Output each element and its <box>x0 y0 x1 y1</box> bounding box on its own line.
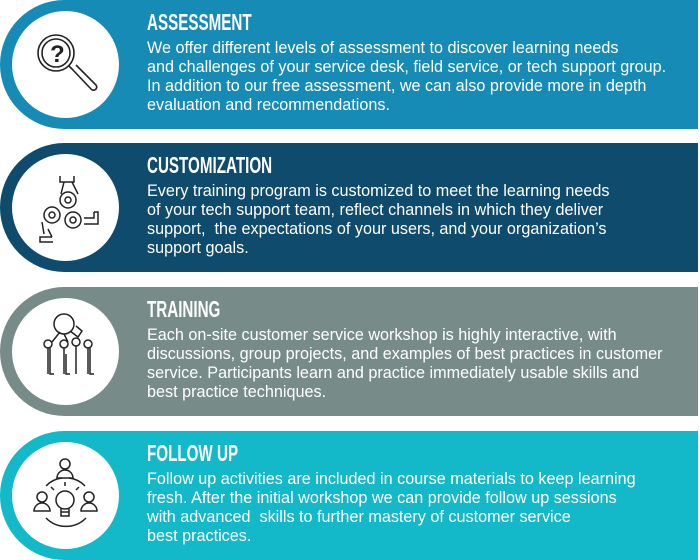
text: training: service. Participants learn and practice immediately usable skills and <box>147 364 639 382</box>
text: assessment <box>147 9 666 114</box>
text: follow up <box>147 440 636 545</box>
icon: people holding lightbulb <box>12 298 119 405</box>
panel: training <box>0 287 698 416</box>
panel: assessment <box>0 0 698 129</box>
text: assessment: In addition to our free assessment, we can also provide more in depth <box>147 77 646 95</box>
text: follow up: Follow up activities are included in course materials to keep learning <box>147 470 636 488</box>
text: assessment: and challenges of your service desk, field service, or tech support group. <box>147 58 666 76</box>
text: assessment: ASSESSMENT <box>147 9 252 35</box>
text: follow up: FOLLOW UP <box>147 440 238 466</box>
icon: magnifier with question mark <box>12 11 119 118</box>
text: training: discussions, group projects, and examples of best practices in customer <box>147 345 663 363</box>
text: training: TRAINING <box>147 296 220 322</box>
text: follow up: best practices. <box>147 527 251 545</box>
icon: magnifier with question mark: ? <box>50 41 65 68</box>
icon: gears and hands <box>12 154 119 261</box>
text: training: best practice techniques. <box>147 383 326 401</box>
icon: lightbulb with people <box>12 442 119 549</box>
text: follow up: with advanced skills to further mastery of customer service <box>147 508 571 526</box>
text: assessment: We offer different levels of assessment to discover learning needs <box>147 39 618 57</box>
text: customization: Every training program is customized to meet the learning needs <box>147 182 609 200</box>
text: customization <box>147 152 609 257</box>
text: training <box>147 296 663 401</box>
text: customization: support, the expectations of your users, and your organization’s <box>147 220 607 238</box>
text: follow up: fresh. After the initial workshop we can provide follow up sessions <box>147 489 617 507</box>
text: training: Each on-site customer service workshop is highly interactive, with <box>147 326 617 344</box>
text: customization: CUSTOMIZATION <box>147 152 272 178</box>
panel: customization <box>0 143 698 272</box>
panel: follow up <box>0 431 698 560</box>
text: customization: of your tech support team, reflect channels in which they deliver <box>147 201 603 219</box>
text: assessment: evaluation and recommendations. <box>147 96 390 114</box>
text: customization: support goals. <box>147 239 249 257</box>
